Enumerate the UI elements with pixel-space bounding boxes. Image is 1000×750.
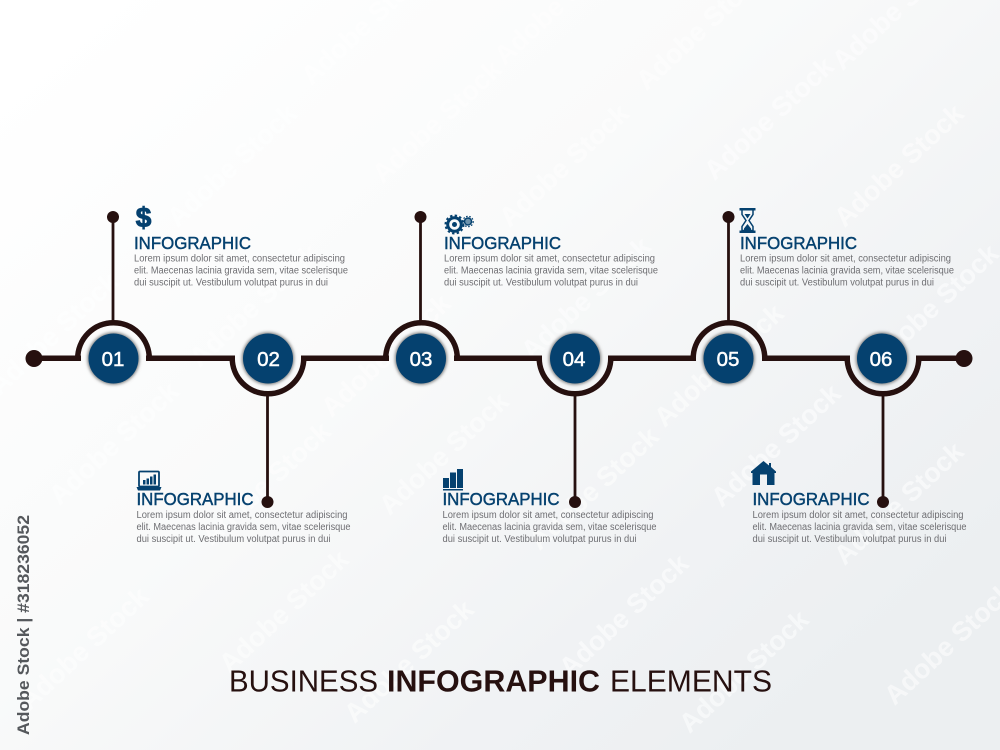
watermark pattern: Adobe Stock: [195, 416, 337, 551]
arc 03: [386, 323, 457, 361]
heading 01: INFOGRAPHIC: [134, 233, 251, 253]
icon: laptop chart: [136, 472, 162, 490]
heading 02: INFOGRAPHIC: [136, 489, 254, 509]
node 04: [549, 332, 601, 384]
stem 05: [722, 211, 734, 322]
stem 04: [569, 395, 581, 508]
stem 02: [262, 395, 274, 508]
body 04: dui suscipit ut. Vestibulum volutpat purus in dui: [442, 534, 636, 545]
body 02: Lorem ipsum dolor sit amet, consectetur adipiscing: [136, 510, 348, 521]
title: [229, 664, 772, 698]
text block 04: [442, 489, 657, 545]
watermark pattern: Adobe Stock: [183, 238, 325, 373]
watermark pattern: Adobe Stock: [338, 594, 480, 729]
body 03: elit. Maecenas lacinia gravida sem, vitae scelerisque: [444, 266, 658, 276]
body 02: dui suscipit ut. Vestibulum volutpat purus in dui: [136, 534, 330, 545]
watermark pattern: Adobe Stock: [828, 98, 970, 233]
watermark pattern: Adobe Stock: [33, 48, 175, 183]
watermark pattern: Adobe Stock: [673, 604, 815, 739]
body 06: Lorem ipsum dolor sit amet, consectetur adipiscing: [752, 510, 964, 521]
icon: dollar: $: [136, 202, 152, 233]
watermark pattern: Adobe Stock: [648, 298, 790, 433]
body 01: elit. Maecenas lacinia gravida sem, vitae scelerisque: [134, 266, 348, 276]
watermark pattern: Adobe Stock: [373, 386, 515, 521]
watermark pattern: Adobe Stock: [698, 51, 840, 186]
body 02: [136, 510, 351, 545]
heading 05: INFOGRAPHIC: [740, 233, 857, 253]
body 05: Lorem ipsum dolor sit amet, consectetur adipiscing: [740, 254, 951, 264]
arc 01: [78, 323, 149, 361]
heading 06: INFOGRAPHIC: [752, 489, 870, 509]
node 04: 04: [563, 348, 585, 371]
watermark pattern: Adobe Stock: [366, 54, 508, 189]
body 06: [752, 510, 967, 545]
timeline start dot: [26, 350, 42, 367]
body 03: dui suscipit ut. Vestibulum volutpat purus in dui: [444, 278, 638, 288]
node 01: [88, 332, 140, 384]
body 05: elit. Maecenas lacinia gravida sem, vitae scelerisque: [740, 266, 954, 276]
watermark pattern: Adobe Stock: [213, 544, 355, 679]
watermark pattern: Adobe Stock: [828, 436, 970, 571]
heading 03: INFOGRAPHIC: [444, 233, 561, 253]
node 02: [242, 332, 294, 384]
arc 06: [847, 356, 919, 394]
body 02: elit. Maecenas lacinia gravida sem, vitae scelerisque: [136, 522, 351, 533]
watermark pattern: Adobe Stock: [515, 231, 657, 366]
timeline end dot: [956, 350, 972, 367]
watermark pattern: Adobe Stock: [493, 98, 635, 233]
text block 01: [134, 233, 348, 288]
icon: hourglass: [740, 208, 756, 233]
watermark pattern: Adobe Stock: [161, 98, 303, 233]
title: BUSINESS: [229, 664, 378, 698]
body 01: [134, 254, 348, 288]
node 03: [395, 332, 447, 384]
body 01: dui suscipit ut. Vestibulum volutpat purus in dui: [134, 278, 328, 288]
body 03: Lorem ipsum dolor sit amet, consectetur adipiscing: [444, 254, 655, 264]
heading 04: INFOGRAPHIC: [442, 489, 560, 509]
timeline connector: [34, 323, 964, 394]
watermark pattern: Adobe Stock: [43, 376, 185, 511]
text block 06: [752, 489, 967, 545]
watermark pattern: Adobe Stock: [13, 581, 155, 716]
node 06: 06: [870, 348, 892, 371]
text block 03: [444, 233, 658, 288]
node 06: [856, 332, 908, 384]
arc 02: [232, 356, 304, 394]
icon: house: [751, 461, 776, 485]
node 03: 03: [410, 348, 432, 371]
node 05: [702, 332, 754, 384]
watermark pattern: Adobe Stock: [523, 421, 665, 556]
node 02: 02: [257, 348, 280, 371]
watermark pattern: Adobe Stock: [315, 288, 457, 423]
body 05: dui suscipit ut. Vestibulum volutpat purus in dui: [740, 278, 934, 288]
body 05: [740, 254, 954, 288]
stem 03: [414, 211, 426, 322]
stem 01: [107, 211, 119, 322]
icon: gears: [446, 216, 473, 234]
body 03: [444, 254, 658, 288]
body 01: Lorem ipsum dolor sit amet, consectetur adipiscing: [134, 254, 345, 264]
arc 04: [539, 356, 611, 394]
text block 02: [136, 489, 351, 545]
body 04: Lorem ipsum dolor sit amet, consectetur adipiscing: [442, 510, 654, 521]
watermark pattern: Adobe Stock: [705, 378, 847, 513]
body 04: elit. Maecenas lacinia gravida sem, vitae scelerisque: [442, 522, 657, 533]
stem 06: [877, 395, 889, 508]
node 01: 01: [102, 348, 124, 371]
body 04: [442, 510, 657, 545]
text block 05: [740, 233, 954, 288]
arc 05: [693, 323, 765, 361]
icon: bar chart: [443, 469, 463, 490]
body 06: dui suscipit ut. Vestibulum volutpat purus in dui: [752, 534, 946, 545]
node 05: 05: [717, 348, 739, 371]
title: ELEMENTS: [610, 664, 772, 698]
watermark pattern: Adobe Stock: [553, 548, 695, 683]
body 06: elit. Maecenas lacinia gravida sem, vitae scelerisque: [752, 522, 967, 533]
watermark id label: Adobe Stock | #318236052: [14, 515, 33, 735]
title: INFOGRAPHIC: [387, 664, 600, 698]
